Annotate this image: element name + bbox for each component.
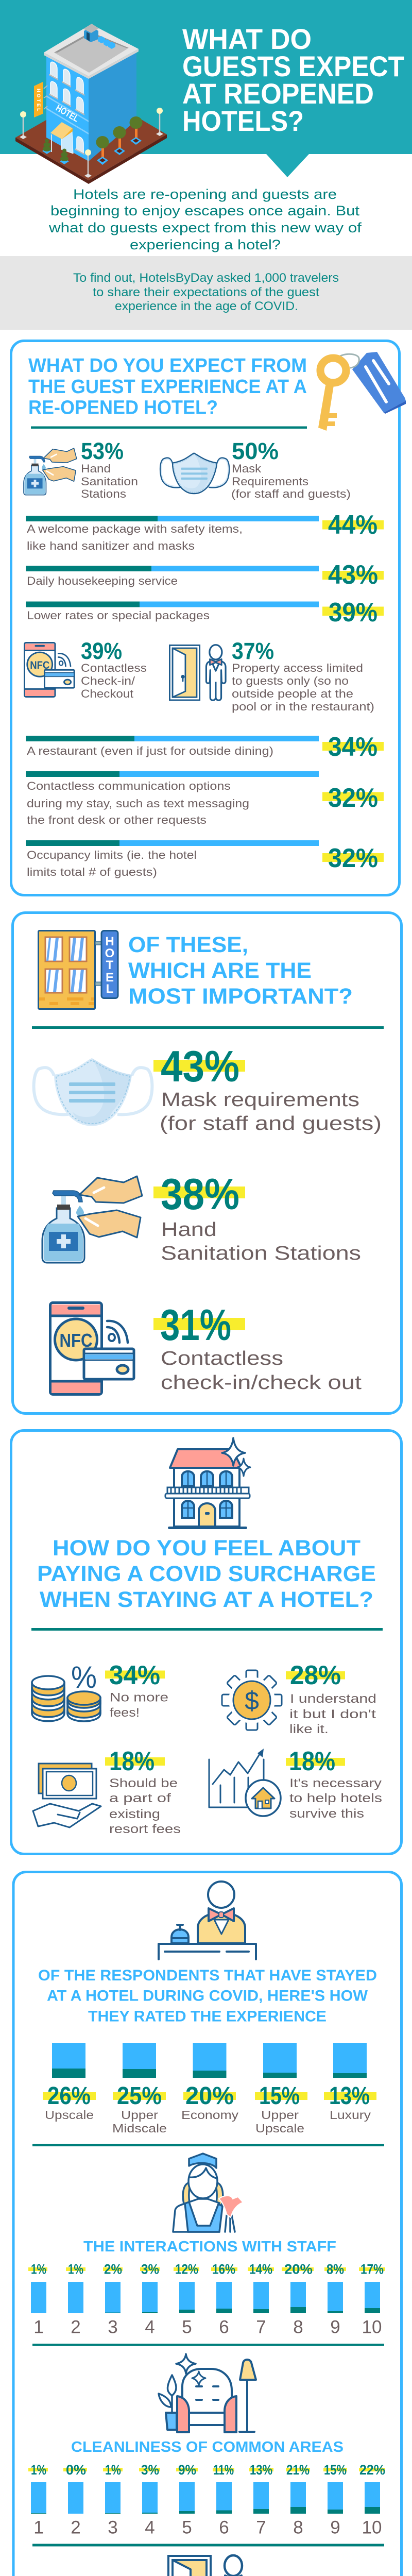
stat: part of resort fees 18%: 18% bbox=[109, 1747, 154, 1776]
panel: covid surcharge bbox=[11, 1430, 402, 1854]
bar: restaurant 34%: A restaurant (even if just for outside dining) bbox=[27, 744, 273, 757]
bar: welcome package 44%: 44% bbox=[328, 510, 377, 540]
chart: interactions with staff ratings: 5 bbox=[182, 2317, 192, 2337]
stat: help hotels survive 18% bbox=[209, 1747, 382, 1821]
chart: interactions with staff ratings: 4 bbox=[145, 2317, 155, 2337]
heading bbox=[128, 933, 353, 1009]
chart: hotel class share: 25% bbox=[117, 2082, 162, 2110]
heading: cleanliness of common areas: CLEANLINESS OF COMMON AREAS bbox=[71, 2439, 344, 2455]
chart: common area ratings: 1% bbox=[31, 2462, 46, 2478]
chart: interactions with staff ratings: 1% bbox=[31, 2262, 46, 2277]
stat: no more fees 34%: No more bbox=[110, 1691, 168, 1704]
chart: common area ratings: 3% bbox=[141, 2462, 159, 2478]
chart: interactions with staff ratings: 8% bbox=[327, 2262, 344, 2277]
chart: hotel class share: 15% bbox=[259, 2082, 300, 2110]
item: mask requirements 43%: (for staff and guests) bbox=[160, 1113, 382, 1134]
stat: property access 37%: pool or in the restaurant) bbox=[232, 700, 374, 713]
stat: mask requirements 50%: Mask bbox=[232, 462, 262, 475]
survey intro band: experience in the age of COVID. bbox=[115, 299, 298, 313]
chart: hotel class share: Upscale bbox=[45, 2108, 94, 2122]
intro text: what do guests expect from this new way of bbox=[48, 220, 362, 235]
stat: hand sanitation 53%: Sanitation bbox=[81, 475, 138, 488]
heading bbox=[37, 1536, 376, 1612]
chart: hotel class share: 26% bbox=[47, 2082, 91, 2110]
item: mask requirements 43%: 43% bbox=[161, 1042, 239, 1091]
bar: contactless communication 32% bbox=[26, 771, 384, 826]
item: contactless check-in 31% bbox=[50, 1301, 362, 1394]
bar: occupancy limits 32%: limits total # of guests) bbox=[27, 866, 157, 878]
stat: property access 37%: to guests only (so no bbox=[232, 674, 349, 687]
stat: mask requirements 50%: Requirements bbox=[232, 475, 308, 488]
chart: common area ratings: 0% bbox=[66, 2462, 86, 2478]
icon: room key with tag bbox=[318, 352, 406, 431]
item: hand sanitation 38% bbox=[42, 1170, 361, 1264]
heading bbox=[28, 355, 307, 418]
chart: interactions with staff ratings: 2 bbox=[71, 2317, 81, 2337]
title: AT REOPENED bbox=[182, 77, 374, 110]
title: WHAT DO bbox=[182, 23, 312, 55]
stat: mask requirements 50%: 50% bbox=[232, 438, 279, 464]
chart: common area ratings: 22% bbox=[359, 2462, 385, 2478]
heading: WHAT DO YOU EXPECT FROM bbox=[28, 355, 307, 377]
item: contactless check-in 31%: 31% bbox=[160, 1301, 231, 1350]
stat: understand it 28% bbox=[222, 1660, 376, 1736]
survey intro band: to share their expectations of the guest bbox=[93, 285, 319, 299]
bar: lower rates 39% bbox=[26, 598, 384, 628]
icon: hotel building sign bbox=[38, 930, 118, 1009]
chart: interactions with staff ratings: 2% bbox=[104, 2262, 122, 2277]
stat: no more fees 34%: % bbox=[71, 1660, 97, 1694]
item: hand sanitation 38%: 38% bbox=[161, 1170, 239, 1219]
heading: THE GUEST EXPERIENCE AT A bbox=[28, 376, 307, 398]
panel: what do you expect bbox=[11, 341, 406, 895]
chart: common area ratings: 1 bbox=[33, 2517, 44, 2538]
chart: hotel class share: Economy bbox=[181, 2108, 239, 2122]
title bbox=[182, 23, 404, 137]
bar: lower rates 39%: 39% bbox=[329, 598, 377, 628]
stat: understand it 28%: $ bbox=[245, 1686, 259, 1715]
stat: property access 37% bbox=[169, 638, 374, 713]
chart: interactions with staff ratings: 8 bbox=[293, 2317, 303, 2337]
chart: interactions with staff ratings: 3 bbox=[108, 2317, 118, 2337]
stat: part of resort fees 18%: existing bbox=[109, 1807, 160, 1821]
icon: armchair, plant and lamp bbox=[159, 2354, 256, 2432]
stat: hand sanitation 53%: 53% bbox=[81, 438, 124, 464]
stat: help hotels survive 18%: It's necessary bbox=[289, 1776, 382, 1790]
bar: welcome package 44%: like hand sanitizer and masks bbox=[27, 539, 195, 552]
chart: hotel class share: Upscale bbox=[255, 2122, 304, 2135]
bar: occupancy limits 32%: 32% bbox=[328, 843, 378, 873]
heading: AT A HOTEL DURING COVID, HERE'S HOW bbox=[47, 1988, 368, 2004]
chart: common area ratings: 5 bbox=[182, 2517, 192, 2538]
chart: common area ratings: 13% bbox=[250, 2462, 272, 2478]
chart: common area ratings: 9 bbox=[330, 2517, 340, 2538]
item: contactless check-in 31%: NFC bbox=[60, 1330, 93, 1351]
stat: property access 37%: 37% bbox=[232, 638, 274, 664]
chart: common area ratings bbox=[28, 2462, 385, 2538]
chart: common area ratings: 4 bbox=[145, 2517, 155, 2538]
bar: housekeeping 43%: 43% bbox=[328, 560, 378, 590]
icon: isometric hotel building bbox=[15, 24, 167, 184]
item: hand sanitation 38%: Hand bbox=[161, 1219, 217, 1241]
stat: contactless check-in 39%: Check-in/ bbox=[81, 674, 135, 687]
panel: most important bbox=[12, 913, 402, 1414]
stat: part of resort fees 18%: resort fees bbox=[109, 1822, 181, 1836]
heading: MOST IMPORTANT? bbox=[128, 984, 353, 1009]
bar: housekeeping 43% bbox=[26, 560, 384, 590]
stat: part of resort fees 18%: Should be bbox=[109, 1776, 178, 1790]
stat: contactless check-in 39%: 39% bbox=[81, 638, 122, 664]
chart: interactions with staff ratings: 20% bbox=[284, 2262, 313, 2277]
heading: OF THESE, bbox=[128, 933, 248, 957]
icon: isometric hotel building: HOTEL bbox=[54, 103, 81, 124]
header band bbox=[0, 0, 412, 177]
chart: hotel class share: Luxury bbox=[330, 2108, 371, 2122]
icon: isometric hotel building: H O T E L bbox=[36, 89, 41, 112]
chart: interactions with staff ratings: 9 bbox=[330, 2317, 340, 2337]
item: mask requirements 43%: Mask requirements bbox=[161, 1089, 359, 1111]
stat: hand sanitation 53%: Stations bbox=[81, 487, 126, 500]
bar: contactless communication 32%: the front desk or other requests bbox=[27, 814, 207, 826]
heading: WHEN STAYING AT A HOTEL? bbox=[40, 1587, 373, 1612]
chart: hotel class share: Upper bbox=[261, 2108, 299, 2122]
chart: common area ratings: 7 bbox=[256, 2517, 266, 2538]
bar: housekeeping 43%: Daily housekeeping service bbox=[27, 574, 178, 587]
stat: property access 37%: Property access limited bbox=[232, 662, 363, 674]
chart: interactions with staff ratings: 3% bbox=[141, 2262, 159, 2277]
bar: contactless communication 32%: Contactless communication options bbox=[27, 779, 231, 792]
heading: OF THE RESPONDENTS THAT HAVE STAYED bbox=[38, 1967, 377, 1984]
chart: interactions with staff ratings: 10 bbox=[362, 2317, 382, 2337]
chart: interactions with staff ratings: 7 bbox=[256, 2317, 266, 2337]
intro text: experiencing a hotel? bbox=[130, 237, 281, 252]
bar: contactless communication 32%: during my stay, such as text messaging bbox=[27, 797, 249, 810]
stat: contactless check-in 39%: Checkout bbox=[81, 687, 133, 700]
chart: interactions with staff ratings: 1 bbox=[33, 2317, 44, 2337]
stat: help hotels survive 18%: 18% bbox=[289, 1747, 335, 1776]
icon: receptionist at desk bbox=[159, 1882, 256, 1959]
bar: lower rates 39%: Lower rates or special packages bbox=[27, 609, 210, 622]
stat: hand sanitation 53%: Hand bbox=[81, 462, 111, 475]
stat: contactless check-in 39%: NFC bbox=[30, 659, 49, 671]
icon: hotel building sign: L bbox=[106, 982, 113, 996]
stat: understand it 28%: 28% bbox=[290, 1660, 341, 1690]
stat: contactless check-in 39%: Contactless bbox=[81, 662, 147, 674]
chart: common area ratings: 1% bbox=[105, 2462, 121, 2478]
chart: hotel class share bbox=[43, 2043, 376, 2135]
bar: occupancy limits 32%: Occupancy limits (ie. the hotel bbox=[27, 849, 197, 861]
bar: contactless communication 32%: 32% bbox=[328, 783, 378, 813]
heading: HOW DO YOU FEEL ABOUT bbox=[53, 1536, 360, 1561]
chart: common area ratings: 21% bbox=[286, 2462, 310, 2478]
stat: help hotels survive 18%: to help hotels bbox=[289, 1791, 382, 1805]
item: mask requirements 43% bbox=[34, 1042, 382, 1134]
icon: house with sparkles bbox=[165, 1438, 250, 1529]
chart: common area ratings: 15% bbox=[324, 2462, 347, 2478]
chart: interactions with staff ratings: 1% bbox=[68, 2262, 83, 2277]
chart: interactions with staff ratings bbox=[28, 2262, 385, 2337]
chart: interactions with staff ratings: 17% bbox=[360, 2262, 384, 2277]
icon: hotel building sign: T bbox=[106, 958, 114, 972]
stat: part of resort fees 18% bbox=[33, 1747, 181, 1836]
stat: no more fees 34% bbox=[32, 1660, 168, 1721]
intro text: Hotels are re-opening and guests are bbox=[73, 187, 337, 202]
chart: interactions with staff ratings: 12% bbox=[175, 2262, 198, 2277]
stat: contactless check-in 39% bbox=[24, 638, 147, 700]
item: contactless check-in 31%: check-in/check out bbox=[161, 1372, 362, 1394]
intro text: beginning to enjoy escapes once again. But bbox=[50, 203, 360, 218]
item: hand sanitation 38%: Sanitation Stations bbox=[161, 1243, 361, 1264]
heading bbox=[38, 1967, 377, 2025]
heading: WHICH ARE THE bbox=[128, 958, 312, 983]
stat: understand it 28%: like it. bbox=[289, 1722, 329, 1736]
intro text bbox=[48, 187, 362, 252]
heading: RE-OPENED HOTEL? bbox=[28, 397, 218, 418]
stat: hand sanitation 53% bbox=[24, 438, 138, 500]
chart: interactions with staff ratings: 6 bbox=[219, 2317, 229, 2337]
chart: common area ratings: 9% bbox=[178, 2462, 196, 2478]
stat: part of resort fees 18%: a part of bbox=[109, 1791, 171, 1805]
item: contactless check-in 31%: Contactless bbox=[161, 1348, 283, 1369]
bar: restaurant 34% bbox=[26, 732, 384, 762]
chart: common area ratings: 2 bbox=[71, 2517, 81, 2538]
icon: hotel building sign: H bbox=[105, 935, 114, 948]
stat: property access 37%: outside people at the bbox=[232, 687, 353, 700]
chart: interactions with staff ratings: 16% bbox=[212, 2262, 235, 2277]
chart: hotel class share: 13% bbox=[329, 2082, 370, 2110]
chart: common area ratings: 8 bbox=[293, 2517, 303, 2538]
icon: hotel building sign: E bbox=[106, 971, 114, 985]
bar: occupancy limits 32% bbox=[26, 840, 384, 878]
chart: common area ratings: 3 bbox=[108, 2517, 118, 2538]
heading: interactions with staff: THE INTERACTIONS WITH STAFF bbox=[83, 2239, 336, 2255]
stat: no more fees 34%: fees! bbox=[110, 1706, 140, 1720]
survey intro band: To find out, HotelsByDay asked 1,000 travelers bbox=[73, 271, 339, 285]
bar: welcome package 44%: A welcome package with safety items, bbox=[27, 522, 243, 535]
icon: hotel building sign: O bbox=[105, 946, 114, 960]
heading: THEY RATED THE EXPERIENCE bbox=[88, 2008, 327, 2025]
stat: mask requirements 50%: (for staff and guests) bbox=[231, 487, 351, 500]
panel: ratings during covid bbox=[13, 1872, 402, 2576]
stat: understand it 28%: it but I don't bbox=[289, 1707, 376, 1721]
chart: common area ratings: 11% bbox=[213, 2462, 234, 2478]
chart: interactions with staff ratings: 14% bbox=[249, 2262, 272, 2277]
chart: common area ratings: 6 bbox=[219, 2517, 229, 2538]
stat: understand it 28%: I understand bbox=[290, 1692, 376, 1706]
stat: help hotels survive 18%: survive this bbox=[289, 1807, 364, 1821]
heading: PAYING A COVID SURCHARGE bbox=[37, 1562, 376, 1586]
bar: welcome package 44% bbox=[26, 510, 384, 552]
icon: housekeeper with duster bbox=[173, 2154, 243, 2232]
bar: restaurant 34%: 34% bbox=[328, 732, 377, 762]
chart: hotel class share: 20% bbox=[185, 2082, 234, 2110]
chart: hotel class share: Midscale bbox=[112, 2122, 167, 2135]
icon: door and doorman bbox=[168, 2555, 247, 2576]
chart: hotel class share: Upper bbox=[121, 2108, 158, 2122]
title: HOTELS? bbox=[182, 105, 304, 137]
stat: no more fees 34%: 34% bbox=[109, 1660, 160, 1690]
chart: common area ratings: 10 bbox=[362, 2517, 382, 2538]
survey intro band bbox=[0, 256, 412, 330]
stat: mask requirements 50% bbox=[160, 438, 351, 500]
